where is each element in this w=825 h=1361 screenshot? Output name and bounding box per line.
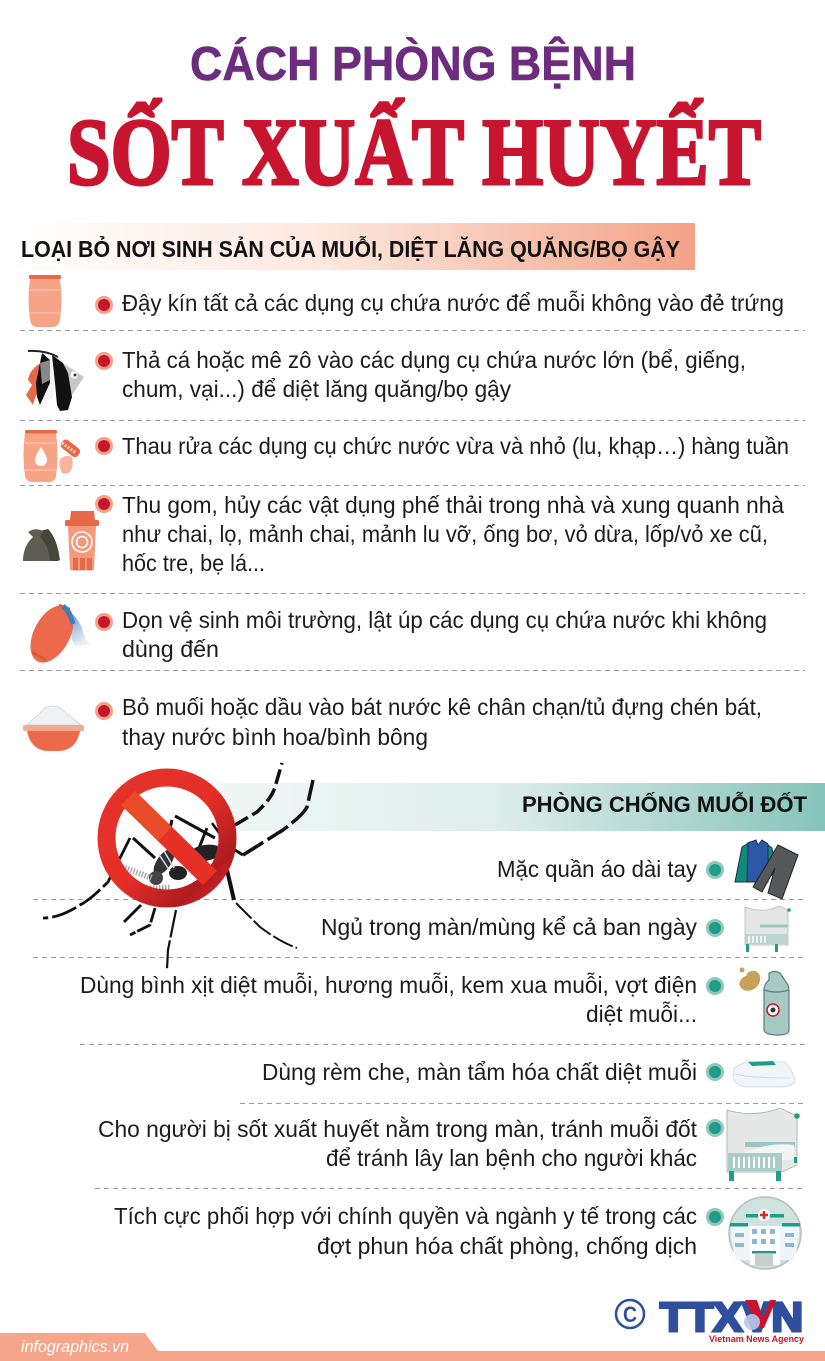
icon: folded net [733, 1061, 795, 1087]
text: thu gom: hốc tre, bẹ lá... [122, 550, 265, 576]
footer band [0, 1333, 825, 1361]
text: ngủ trong màn: Ngủ trong màn/mùng kể cả ban ngày [321, 914, 697, 940]
bullet [706, 861, 724, 879]
icon: barrel, brush and cloth [24, 430, 82, 482]
text: tích cực: đợt phun hóa chất phòng, chống dịch [317, 1233, 697, 1259]
text: bỏ muối: thay nước bình hoa/bình bông [122, 724, 428, 750]
mosquito body [122, 842, 223, 888]
bullet [706, 1208, 724, 1226]
logo: TTXVN: Vietnam News Agency [709, 1334, 805, 1345]
logo: TTXVN: TTXVN [660, 1294, 803, 1340]
text: dọn vệ sinh: dùng đến [122, 636, 219, 662]
text: dọn vệ sinh [122, 607, 767, 662]
text: đậy kín: Đậy kín tất cả các dụng cụ chứa nước để muỗi không vào đẻ trứng [122, 290, 784, 316]
text: thau rửa: Thau rửa các dụng cụ chức nước vừa và nhỏ (lu, khạp…) hàng tuần [122, 433, 789, 459]
footer band: infographics.vn [21, 1337, 129, 1356]
text: thu gom: như chai, lọ, mảnh chai, mảnh lu vỡ, ống bơ, vỏ dừa, lốp/vỏ xe cũ, [122, 521, 768, 547]
text: cho người bị: Cho người bị sốt xuất huyết nằm trong màn, tránh muỗi đốt [98, 1116, 698, 1142]
bullet [706, 977, 724, 995]
icon: garbage bags and bin [23, 511, 99, 570]
icon: insect spray [739, 968, 789, 1035]
logo: copyright: C [623, 1302, 637, 1327]
bullet [95, 296, 113, 314]
text: cho người bị: để tránh lây lan bệnh cho người khác [326, 1145, 697, 1171]
mosquito legs [43, 763, 313, 969]
icon: bowl of salt [23, 706, 84, 751]
section header: phòng chống muỗi đốt: PHÒNG CHỐNG MUỖI ĐỐT [522, 791, 808, 817]
icon: jacket and trousers [735, 840, 798, 899]
section header: phòng chống muỗi đốt [220, 783, 825, 831]
text: thả cá: Thả cá hoặc mê zô vào các dụng cụ chứa nước lớn (bể, giếng, [122, 347, 746, 373]
text: dùng bình xịt [80, 972, 697, 1027]
bullet [95, 495, 113, 513]
text: dùng bình xịt: Dùng bình xịt diệt muỗi, hương muỗi, kem xua muỗi, vợt điện [80, 972, 697, 998]
text: thả cá: chum, vại...) để diệt lăng quăng/bọ gậy [122, 376, 511, 402]
text: tích cực: Tích cực phối hợp với chính quyền và ngành y tế trong các [114, 1203, 697, 1229]
illustration: mosquito with prohibition sign [43, 763, 313, 969]
text: bỏ muối: Bỏ muối hoặc dầu vào bát nước kê chân chạn/tủ đựng chén bát, [122, 694, 762, 720]
bullet [95, 702, 113, 720]
icon: overturned jar pouring water [22, 598, 91, 670]
bullet [95, 613, 113, 631]
section header: loại bỏ nơi sinh sản: LOẠI BỎ NƠI SINH SẢN CỦA MUỖI, DIỆT LĂNG QUĂNG/BỌ GẬY [21, 234, 680, 262]
bullet [706, 919, 724, 937]
text: thu gom [122, 492, 784, 576]
text: thu gom: Thu gom, hủy các vật dụng phế thải trong nhà và xung quanh nhà [122, 492, 784, 518]
section header: loại bỏ nơi sinh sản [8, 223, 695, 270]
logo: copyright [616, 1300, 644, 1328]
text: tích cực [114, 1203, 697, 1259]
text: cho người bị [98, 1116, 698, 1171]
icon: bed with net [745, 906, 791, 952]
icon: bed with net, large [727, 1108, 800, 1181]
text: mặc quần áo: Mặc quần áo dài tay [497, 856, 697, 882]
title: cách phòng bệnh: CÁCH PHÒNG BỆNH [190, 36, 636, 91]
text: dùng rèm che: Dùng rèm che, màn tẩm hóa chất diệt muỗi [262, 1059, 697, 1085]
bullet [95, 437, 113, 455]
bullet [706, 1063, 724, 1081]
icon: hospital [729, 1197, 801, 1269]
text: dùng bình xịt: diệt muỗi... [586, 1001, 697, 1027]
icon: barrel [28, 275, 62, 327]
prohibition ring [106, 778, 228, 898]
text: dọn vệ sinh: Dọn vệ sinh môi trường, lật úp các dụng cụ chứa nước khi không [122, 607, 767, 633]
icon: fish [26, 351, 84, 411]
bullet [95, 352, 113, 370]
text: bỏ muối [122, 694, 762, 750]
bullet [706, 1119, 724, 1137]
text: thả cá [122, 347, 746, 402]
